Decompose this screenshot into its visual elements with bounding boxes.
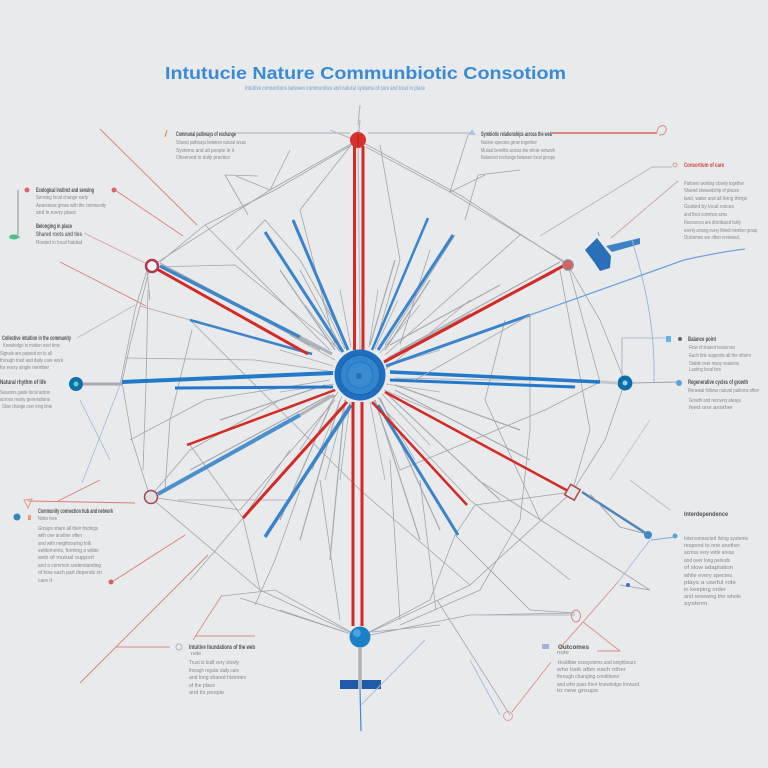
text block: top right: Symbiotic relationships across the web	[481, 132, 552, 138]
text block: lower left: with one another often	[37, 533, 82, 539]
node: right blue	[600, 376, 632, 390]
text block: middle right 1: Balance point	[688, 337, 716, 343]
text block: lower right: and over long periods	[684, 558, 730, 564]
text block: middle left 2: Seasons guide local action	[0, 390, 50, 396]
text block: upper right: Outcomes are often reviewed.	[684, 235, 740, 241]
text block: lower left: Groups share all their findings	[38, 526, 98, 532]
text block: top left: Observed in daily practice	[176, 155, 230, 161]
text block: lower left: of how each part depends on	[38, 570, 102, 576]
icon: blue device upper right	[585, 232, 640, 271]
callout leader lines	[28, 126, 745, 715]
text block: bottom left: and long shared histories	[189, 675, 246, 681]
text block: bottom left: through regular daily care	[189, 668, 239, 674]
text block: upper right: Shared stewardship of places	[684, 188, 739, 194]
text block: middle right 2: feed one another	[689, 405, 733, 411]
text block: bottom right	[556, 645, 639, 694]
text block: middle right 2: Growth and recovery always	[689, 398, 741, 404]
spokes: grey inner sections next to the hub	[300, 314, 470, 415]
web: grey network structure	[120, 130, 625, 715]
text block: lower right: across very wide areas	[684, 550, 734, 556]
text block: top right: Native species grow together	[481, 140, 537, 146]
text block: bottom left: of the place	[189, 683, 215, 689]
text block: upper right: Guided by local voices	[684, 204, 734, 210]
text block: bottom left: note	[191, 651, 201, 657]
text block: lower right: Interconnected living systems	[684, 536, 748, 542]
text block: top left: Systems and all people in it	[176, 148, 234, 154]
text block: middle left 1: through trust and daily care work	[0, 358, 63, 364]
text block: middle right 1: Lasting local ties	[689, 367, 721, 373]
text block: top left: Communal pathways of exchange	[176, 132, 236, 138]
text block: upper left 2: Rooted in local habitat	[36, 240, 82, 246]
text block: lower left: Community connection hub and network	[38, 509, 113, 515]
text block: lower right: plays a useful role	[684, 580, 736, 586]
central hub	[334, 350, 386, 400]
text block: middle left 2: Slow change over long time	[2, 404, 52, 410]
text block: upper left 1: and in every place	[36, 210, 76, 216]
node: top red	[350, 132, 366, 148]
text block: upper left 1: Ecological instinct and sensing	[36, 188, 94, 194]
node: lower left ring	[144, 490, 158, 504]
text block: middle right 1	[688, 337, 751, 373]
spokes: blue	[122, 218, 650, 537]
text block: bottom right: who look after each other	[556, 667, 626, 673]
text block: upper left 2: Belonging in place	[36, 224, 72, 230]
text block: top right: Mutual benefits across the whole network	[481, 148, 555, 154]
text block: upper right: land, water and all living things	[684, 196, 747, 202]
text block: bottom right: Healthier ecosystems and neighbours	[558, 660, 636, 666]
node: bottom blue ball with stem and bar	[340, 626, 381, 731]
text block: bottom left	[189, 645, 255, 696]
text block: middle left 2: across many generations	[0, 397, 50, 403]
subtitle: Intuitive connections between communities and natural systems of care and trust in place	[245, 86, 425, 92]
text block: upper left 2	[36, 224, 82, 246]
text block: upper left 1: Sensing local change early	[36, 195, 88, 201]
spokes: fine grey fan around the hub	[280, 290, 440, 480]
text block: bottom right: Outcomes	[558, 645, 590, 651]
text block: bottom left: and its people	[189, 690, 224, 696]
text block: lower right: while every species	[683, 573, 732, 579]
text block: top right: Balanced exchange between local groups	[481, 155, 555, 161]
text block: middle left 1: for every single member	[0, 365, 49, 371]
text block: bottom right: to new groups	[557, 688, 598, 694]
text block: lower left	[37, 509, 113, 584]
text block: lower left: web of mutual support	[37, 555, 94, 561]
spokes: red	[155, 146, 570, 626]
text block: middle left 2: Natural rhythm of life	[0, 380, 47, 386]
text block: upper right: and their common aims	[684, 212, 727, 218]
text block: lower right: Interdependence	[684, 512, 729, 518]
text block: lower right: respond to one another	[684, 543, 740, 549]
text block: lower left: and with neighbouring folk	[38, 541, 91, 547]
text block: lower right: system	[684, 601, 707, 607]
text block: lower left: care it	[38, 578, 52, 584]
text block: middle left 1	[0, 336, 71, 371]
text block: upper right: Resources are distributed fairly	[684, 220, 741, 226]
text block: top right	[481, 132, 555, 161]
text block: lower right: of slow adaptation	[684, 565, 733, 571]
text block: middle left 1: Knowledge in motion over time	[3, 343, 60, 349]
text block: top left	[176, 132, 246, 161]
text block: bottom right: through changing conditions	[557, 674, 619, 680]
node: upper right ring	[563, 260, 573, 270]
text block: bottom right: and who pass their knowledge forward	[557, 682, 639, 688]
text block: middle right 1: Flow of shared resources	[689, 345, 735, 351]
node: left blue	[69, 377, 122, 391]
text block: lower right	[683, 512, 748, 607]
small markers	[9, 129, 682, 720]
text block: middle right 1: Stable over many seasons	[689, 361, 739, 367]
text block: upper left 1: Awareness grows with the community	[36, 203, 106, 209]
text block: bottom left: Trust is built very slowly	[189, 660, 239, 666]
text block: upper right	[684, 163, 757, 241]
node: upper left ring	[146, 260, 158, 272]
text block: lower right: in keeping order	[684, 587, 726, 593]
text block: lower left: and a common understanding	[38, 563, 101, 569]
text block: lower right: and renewing the whole	[684, 594, 741, 600]
text block: middle left 2	[0, 380, 52, 410]
text block: lower left: Notes here	[38, 516, 57, 522]
text block: top left: Shared pathways between natural areas	[176, 140, 246, 146]
text block: upper left 1	[36, 188, 106, 216]
text block: upper left 2: Shared roots and ties	[36, 232, 82, 238]
text block: bottom left: Intuitive foundations of the web	[189, 645, 255, 651]
spokes: thin grey bundles	[160, 105, 560, 560]
text block: middle left 1: Collective intuition in the community	[2, 336, 71, 342]
text block: upper right: Partners working closely together	[684, 181, 744, 187]
title: Intutucie Nature Communbiotic Consotiom	[165, 63, 566, 83]
text block: lower left: settlements, forming a wider	[38, 548, 99, 554]
node: lower right ring	[565, 484, 580, 500]
text block: middle right 2	[688, 380, 759, 411]
text block: bottom right: note	[557, 650, 569, 656]
text block: middle left 1: Signals are passed on to all	[0, 351, 52, 357]
text block: upper right: Consortium of care	[684, 163, 724, 169]
